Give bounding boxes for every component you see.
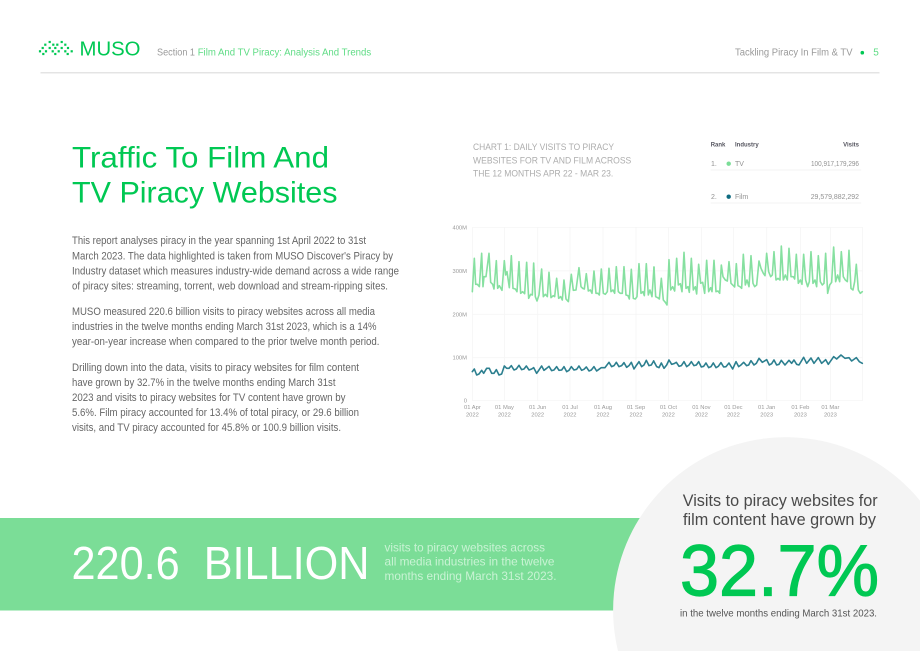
- line chart: daily visits: [452, 225, 863, 418]
- text block: total visits: MUSO measured 220.6 billion visits to piracy websites across all media: [72, 306, 375, 318]
- x axis labels: 2022: [630, 412, 642, 418]
- legend table: Visits: [843, 142, 860, 148]
- section label: Section 1: [157, 48, 195, 59]
- x axis labels: 01 Aug: [594, 405, 612, 411]
- text block: total visits: year-on-year increase when compared to the prior twelve month period.: [72, 336, 380, 348]
- x axis labels: 2022: [498, 412, 511, 418]
- legend row: Film: 2.: [711, 194, 717, 201]
- big number: 220.6 BILLION: [72, 537, 370, 589]
- chart title: WEBSITES FOR TV AND FILM ACROSS: [473, 155, 631, 165]
- text block: film and TV growth: Drilling down into the data, visits to piracy websites for film content: [72, 362, 359, 374]
- x axis labels: 2022: [695, 412, 708, 418]
- section label: Film And TV Piracy: Analysis And Trends: [198, 48, 371, 59]
- banner: 220.6 billion: [0, 518, 660, 610]
- callout circle: film growth: [613, 437, 920, 651]
- chart title: CHART 1: DAILY VISITS TO PIRACY: [473, 142, 614, 152]
- x axis labels: 01 Feb: [791, 405, 809, 411]
- banner caption: visits to piracy websites across: [384, 540, 545, 554]
- x axis labels: 01 Sep: [627, 405, 645, 411]
- text block: film and TV growth: have grown by 32.7% in the twelve months ending March 31st: [72, 377, 336, 389]
- chart title: THE 12 MONTHS APR 22 - MAR 23.: [473, 169, 613, 179]
- x axis labels: 01 Jun: [529, 405, 546, 411]
- x axis labels: 2023: [824, 412, 837, 418]
- legend row: TV: [711, 161, 861, 170]
- text block: intro: [72, 235, 399, 292]
- x axis labels: 2022: [564, 412, 576, 418]
- text block: intro: of piracy sites: streaming, torrent, web download and stream-ripping sites.: [72, 280, 388, 292]
- text block: total visits: industries in the twelve months ending March 31st 2023, which is a 14%: [72, 321, 377, 333]
- y axis labels: [452, 225, 467, 405]
- logo: MUSO: [39, 39, 140, 61]
- x axis labels: 2022: [466, 412, 479, 418]
- text block: film and TV growth: [72, 362, 359, 434]
- callout heading: [683, 492, 878, 529]
- legend table: Rank: [711, 142, 726, 148]
- series: Film: [472, 355, 862, 375]
- x axis labels: 2022: [597, 412, 609, 418]
- x axis labels: 2022: [531, 412, 544, 418]
- logo: MUSO: MUSO: [80, 39, 140, 61]
- x axis labels: 01 May: [495, 405, 514, 411]
- x axis labels: 01 Dec: [724, 405, 743, 411]
- legend row: TV: TV: [735, 161, 744, 168]
- text block: film and TV growth: 2023 and visits to piracy websites for TV content have grown by: [72, 392, 346, 404]
- x axis labels: 01 Apr: [464, 405, 481, 411]
- callout heading: film content have grown by: [683, 511, 877, 529]
- icon: dotted peaks: [39, 41, 73, 55]
- x axis labels: 2023: [794, 412, 807, 418]
- report name and page number: Tackling Piracy In Film & TV: [735, 48, 853, 59]
- title: TV Piracy Websites: [72, 177, 338, 210]
- y axis labels: 400M: [452, 225, 467, 231]
- text block: total visits: [72, 306, 380, 348]
- x axis labels: 2022: [662, 412, 675, 418]
- y axis labels: 100M: [452, 356, 467, 362]
- x axis labels: 01 Oct: [660, 405, 677, 411]
- x axis labels: 2023: [760, 412, 773, 418]
- text block: intro: This report analyses piracy in the year spanning 1st April 2022 to 31st: [72, 235, 366, 247]
- chart title: [473, 142, 631, 179]
- y axis labels: 300M: [452, 269, 467, 275]
- x axis labels: 01 Jan: [758, 405, 775, 411]
- text block: film and TV growth: 5.6%. Film piracy accounted for 13.4% of total piracy, or 29.6 billion: [72, 407, 359, 419]
- text block: film and TV growth: visits, and TV piracy accounted for 45.8% or 100.9 billion visits.: [72, 422, 341, 434]
- legend row: Film: 29,579,882,292: [811, 194, 859, 201]
- callout heading: Visits to piracy websites for: [683, 492, 878, 510]
- legend row: TV: 100,917,179,296: [811, 161, 859, 168]
- legend row: Film: [711, 194, 861, 203]
- x axis labels: 01 Mar: [821, 405, 839, 411]
- banner caption: [384, 540, 556, 583]
- series: TV: [472, 246, 862, 305]
- title: Traffic To Film And: [72, 141, 329, 174]
- legend row: TV: 1.: [711, 161, 717, 168]
- legend row: Film: Film: [735, 194, 748, 201]
- legend table: Industry: [735, 142, 759, 148]
- report name and page number: 5: [873, 48, 879, 59]
- x axis labels: 01 Nov: [692, 405, 711, 411]
- title: [72, 141, 338, 210]
- text block: intro: March 2023. The data highlighted is taken from MUSO Discover's Piracy by: [72, 250, 394, 262]
- y axis labels: 200M: [452, 312, 467, 318]
- text block: intro: Industry dataset which measures industry-wide demand across a wide range: [72, 266, 399, 278]
- banner caption: all media industries in the twelve: [384, 554, 555, 568]
- x axis labels: 2022: [727, 412, 740, 418]
- header: [39, 39, 879, 74]
- callout note: in the twelve months ending March 31st 2023.: [680, 608, 877, 620]
- banner caption: months ending March 31st 2023.: [384, 569, 556, 583]
- legend table: [711, 142, 861, 203]
- y axis labels: 0: [464, 399, 467, 405]
- callout figure: 32.7%: [680, 532, 879, 612]
- x axis labels: 01 Jul: [562, 405, 578, 411]
- x axis labels: [464, 405, 839, 418]
